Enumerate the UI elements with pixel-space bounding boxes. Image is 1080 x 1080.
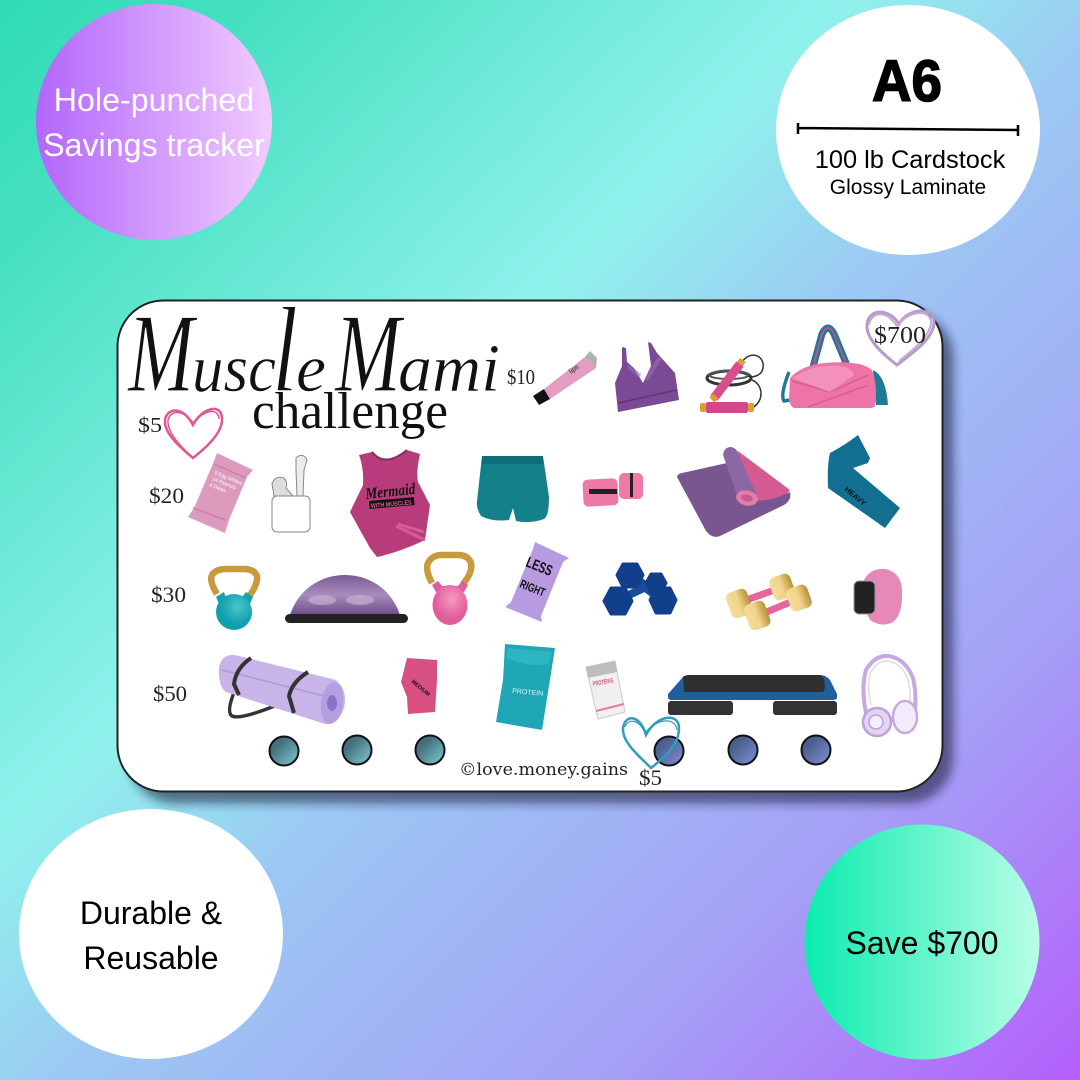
price label: $5 start: $5 xyxy=(138,413,162,437)
icon: purple heart with $700 xyxy=(867,311,934,365)
icon: pink medium band xyxy=(401,658,437,714)
icon: lavender headphones xyxy=(863,656,917,736)
title: Muscle Mami: M xyxy=(334,292,405,416)
icon: earbuds in case xyxy=(272,455,310,532)
icon: teal heart with $5: $5 xyxy=(639,765,662,790)
badge: hole-punched savings tracker: Savings tracker xyxy=(43,127,265,163)
badge: A6 size and cardstock: Glossy Laminate xyxy=(830,176,986,199)
icon: purple heart with $700: $700 xyxy=(874,323,926,349)
icon: teal resistance band xyxy=(828,435,900,528)
icon: pink medium band: MEDIUM xyxy=(410,679,431,698)
icon: pink protein bar: 9 Egg Whites xyxy=(213,470,244,487)
icon: purple and pink yoga mat xyxy=(677,447,790,537)
icon: protein powder jar: PROTEINS xyxy=(592,677,614,688)
icon: pink heart xyxy=(165,409,222,458)
icon: pink kettlebell xyxy=(427,555,471,625)
subtitle: challenge: challenge xyxy=(252,383,448,440)
price label: $50: $50 xyxy=(153,681,187,706)
icon: pink smartwatch xyxy=(854,569,902,625)
icon: purple snack bar: LESS xyxy=(524,554,555,580)
title: Muscle Mami: e xyxy=(296,330,326,406)
icon: pink mermaid tank top xyxy=(350,450,430,557)
price label: $20: $20 xyxy=(149,483,184,508)
icon: lip gloss tube: lips xyxy=(568,363,581,376)
icon: pink mermaid tank top: WITH MUSCLES xyxy=(371,499,413,510)
badge: A6 size and cardstock: A6 xyxy=(872,49,942,114)
icon: navy dumbbells xyxy=(604,564,676,614)
icon: lip gloss tube xyxy=(533,351,597,405)
icon: teal kettlebell xyxy=(211,569,257,630)
price label: $10: $10 xyxy=(507,365,535,389)
icon: teal shorts xyxy=(477,456,549,522)
icon: aerobic step platform xyxy=(668,675,837,715)
icon: teal protein pouch: PROTEIN xyxy=(512,688,543,698)
badge: durable and reusable: Durable & xyxy=(80,895,222,931)
icon: teal protein pouch xyxy=(496,644,555,730)
badge: durable and reusable: Reusable xyxy=(83,940,219,976)
icon: teal resistance band: HEAVY xyxy=(843,485,868,508)
icon: pink protein bar: 4 Dates xyxy=(208,482,227,494)
price label: $30: $30 xyxy=(151,582,186,607)
badge: hole-punched savings tracker xyxy=(36,4,272,240)
badge: save $700: Save $700 xyxy=(845,925,999,961)
badge: hole-punched savings tracker: Hole-punched xyxy=(54,82,254,118)
icon: pink mermaid tank top: Mermaid xyxy=(364,481,417,503)
icon: pink wrist weights xyxy=(582,473,643,507)
badge: A6 size and cardstock: 100 lb Cardstock xyxy=(815,146,1006,174)
icon: purple snack bar xyxy=(505,542,569,622)
icon: pink protein bar: 14 Peanuts xyxy=(211,476,237,492)
icon: purple sports bra xyxy=(615,342,679,412)
badge: durable and reusable xyxy=(19,809,283,1059)
title: Muscle Mami: l xyxy=(272,283,298,418)
icon: purple snack bar: RIGHT xyxy=(518,577,548,600)
icon: protein powder jar xyxy=(586,661,625,719)
icon: pink protein bar xyxy=(188,453,253,533)
title: Muscle Mami: M xyxy=(127,292,198,416)
badge: A6 size and cardstock xyxy=(776,5,1040,255)
title: Muscle Mami: usc xyxy=(192,330,276,406)
icon: lavender rolled mat with strap xyxy=(219,655,346,725)
icon: pink gym bag xyxy=(783,328,888,408)
icon: jump rope xyxy=(700,355,763,413)
icon: gold and pink dumbbells xyxy=(724,572,813,632)
panel: savings tracker card xyxy=(118,283,954,804)
icon: purple balance dome xyxy=(285,575,408,623)
title: Muscle Mami: ami xyxy=(398,330,500,406)
icon: teal heart with $5 xyxy=(623,718,679,790)
copyright credit: ©love.money.gains xyxy=(459,760,628,780)
hole punches xyxy=(270,736,830,766)
badge: save $700 xyxy=(804,824,1040,1060)
